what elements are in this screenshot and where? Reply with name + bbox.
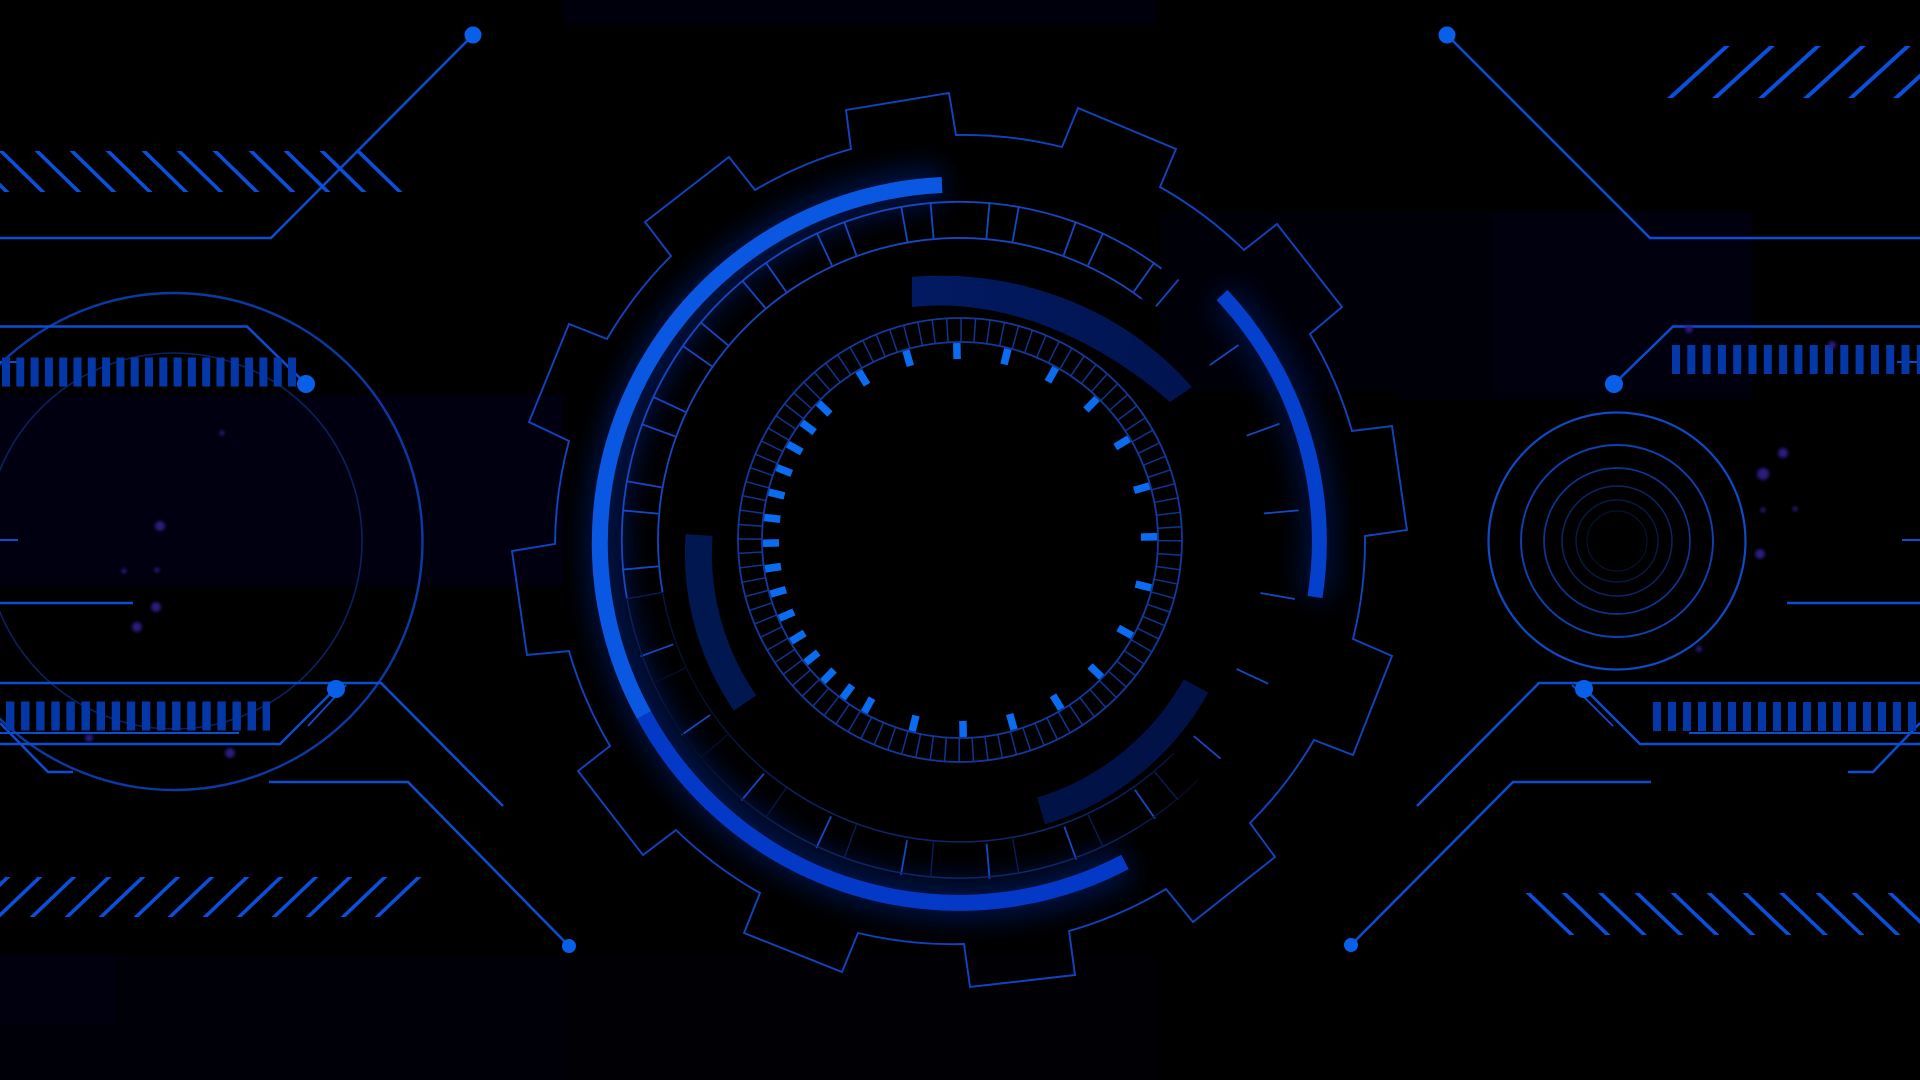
right lower hatch [1528,893,1920,935]
left lower frame with node [0,680,503,806]
left particles [85,430,235,758]
left upper frame with node [0,326,315,393]
left lower bar strip [6,702,270,730]
inner tick ring [738,318,1182,762]
right lower bar strip [1653,702,1920,731]
left short lines [0,540,133,603]
gear outline [512,93,1407,987]
left top connector with node [0,26,482,238]
right short lines [1787,540,1920,603]
right lower connector with node [1344,782,1651,952]
main glowing arc [600,185,1125,903]
inner bright ticks [763,343,1157,737]
left lower hatch [0,877,419,917]
right top hatch [1670,46,1920,98]
left top hatch [0,151,400,192]
segmented ring: bright section [622,202,1299,879]
right lower frame with node [1417,680,1920,806]
right particles [1685,325,1836,652]
right upper frame with node [1605,326,1920,393]
segmented ring: dim section [626,592,1199,878]
left upper bar strip [2,358,297,386]
right concentric circles [1488,412,1746,670]
left panel: radar circles [0,293,422,790]
right upper bar strip [1672,345,1920,374]
right glowing arc [1222,295,1319,597]
right top connector with node [1438,26,1920,238]
dark arc segments [698,276,1196,811]
left lower connector with node [269,782,576,953]
